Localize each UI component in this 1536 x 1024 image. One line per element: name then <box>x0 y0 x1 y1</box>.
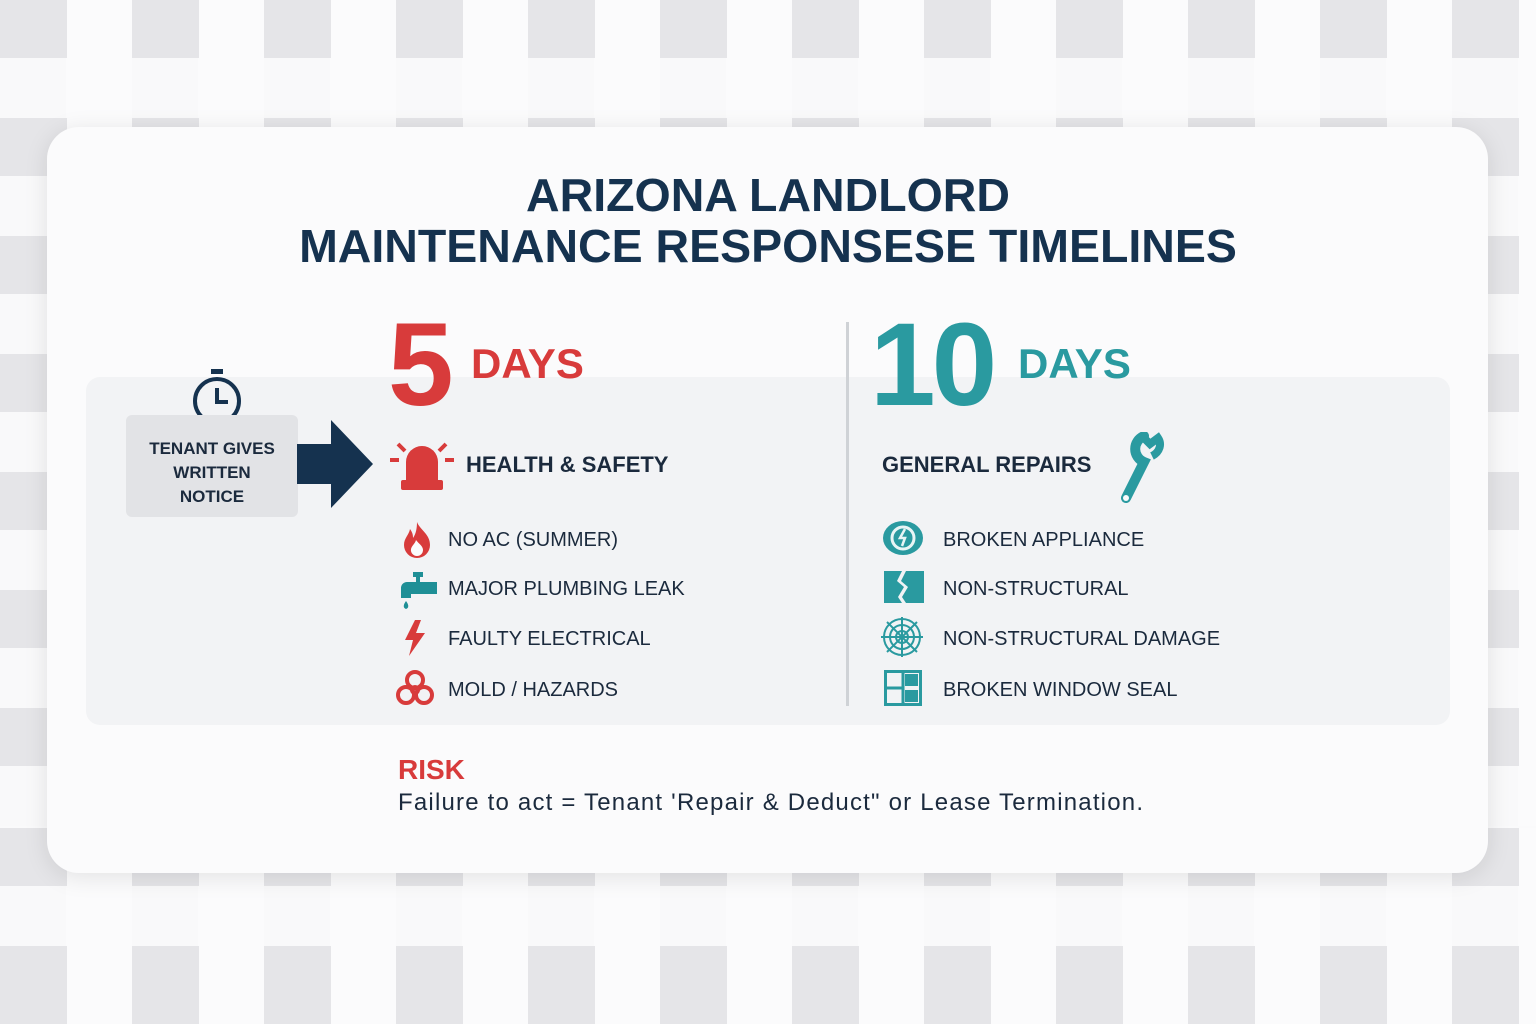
icon: lightning <box>405 620 425 656</box>
box: tenant gives written notice: NOTICE <box>180 487 244 506</box>
icon: faucet <box>401 572 437 609</box>
icon: fire <box>404 522 430 558</box>
icon: biohazard <box>396 670 434 705</box>
icon: wrench <box>1121 432 1164 503</box>
icon: web <box>881 617 923 657</box>
list: general items: NON-STRUCTURAL <box>943 578 1129 600</box>
title: MAINTENANCE RESPONSESE TIMELINES <box>299 220 1237 272</box>
icon: window <box>884 670 922 706</box>
box: tenant gives written notice <box>126 415 298 517</box>
icon: siren <box>390 442 454 490</box>
list: health items <box>396 522 685 705</box>
heading: 10 days: 10 <box>870 299 993 431</box>
list: general items: NON-STRUCTURAL DAMAGE <box>943 628 1220 650</box>
risk text: Failure to act = Tenant 'Repair & Deduct" or Lease Termination. <box>398 789 1144 816</box>
box: tenant gives written notice: WRITTEN <box>173 463 251 482</box>
list: health items: MAJOR PLUMBING LEAK <box>448 578 685 600</box>
text: DAYS <box>1018 340 1131 387</box>
heading: general repairs: GENERAL REPAIRS <box>882 452 1091 477</box>
list: general items: BROKEN APPLIANCE <box>943 529 1144 551</box>
icon: stopwatch <box>193 369 241 415</box>
box: tenant gives written notice: TENANT GIVES <box>149 439 275 458</box>
heading: health & safety: HEALTH & SAFETY <box>466 452 668 477</box>
list: health items: MOLD / HAZARDS <box>448 679 618 701</box>
icon: broken appliance <box>883 521 923 555</box>
heading: 5 days: 5 <box>388 299 454 431</box>
arrow <box>297 420 373 508</box>
icon: cracked wall <box>884 571 924 603</box>
list: general items: BROKEN WINDOW SEAL <box>943 679 1177 701</box>
list: general items <box>881 521 1220 706</box>
text: DAYS <box>471 340 584 387</box>
title: ARIZONA LANDLORD <box>526 169 1010 221</box>
title <box>299 169 1237 272</box>
divider <box>846 322 849 706</box>
list: health items: FAULTY ELECTRICAL <box>448 628 651 650</box>
card <box>47 127 1488 873</box>
list: health items: NO AC (SUMMER) <box>448 529 618 551</box>
risk heading: RISK <box>398 754 465 785</box>
panel: content band <box>86 377 1450 725</box>
